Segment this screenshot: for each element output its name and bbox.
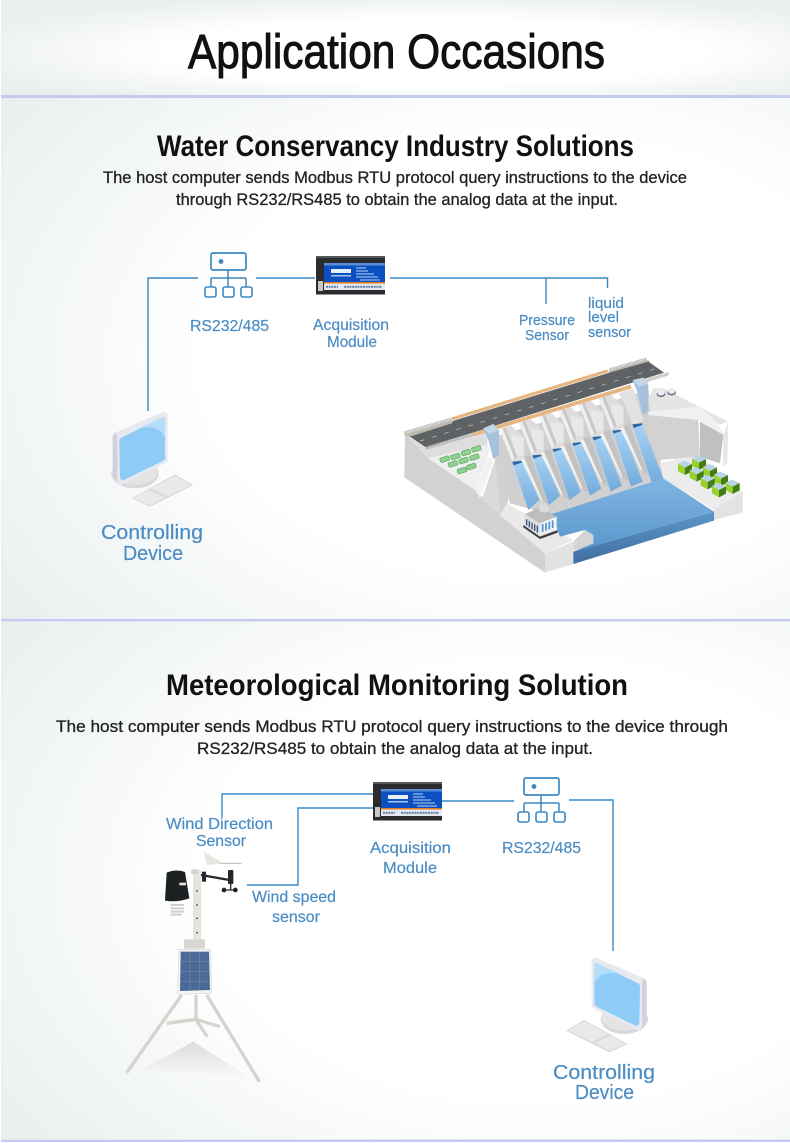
road — [405, 420, 452, 437]
label: RS232/485: RS232/485 — [502, 840, 581, 857]
right green blocks — [678, 456, 740, 497]
label: wind speed sensor — [252, 889, 336, 926]
text block: meteorological description — [56, 717, 728, 758]
label: controlling device — [101, 522, 203, 565]
title: Application Occasions — [188, 26, 605, 79]
label: liquid level sensor: level — [588, 310, 619, 326]
text block: water conservancy description: The host computer sends Modbus RTU protocol query instructions to the device — [103, 168, 687, 187]
text block: water conservancy description: through RS232/RS485 to obtain the analog data at the input. — [176, 190, 618, 209]
label: acquisition module: Acquisition — [370, 840, 451, 857]
panel: water conservancy background — [1, 98, 790, 619]
label: liquid level sensor: sensor — [588, 325, 631, 341]
heading: meteorological monitoring: Meteorological Monitoring Solution — [166, 669, 628, 702]
icon: acquisition module — [373, 782, 442, 820]
label: acquisition module: Module — [383, 860, 437, 877]
label: pressure sensor: Sensor — [525, 328, 569, 344]
icon: RS232/485 network — [205, 253, 252, 297]
pool — [552, 478, 714, 552]
tanks — [657, 391, 665, 397]
text block: meteorological description: The host computer sends Modbus RTU protocol query instructions to the device through — [56, 717, 728, 736]
label: acquisition module — [313, 317, 389, 351]
text block: meteorological description: RS232/RS485 to obtain the analog data at the input. — [197, 739, 593, 758]
label: liquid level sensor: liquid — [588, 296, 624, 312]
icon: controlling device computer — [566, 957, 648, 1052]
label: pressure sensor: Pressure — [519, 313, 575, 329]
connector lines: water conservancy — [148, 278, 608, 411]
label: wind direction sensor: Wind Direction — [166, 816, 273, 833]
left embankment — [404, 433, 545, 573]
icon: RS232/485 network — [518, 778, 565, 822]
panel: meteorological background — [1, 622, 790, 1139]
label: wind direction sensor — [166, 816, 273, 850]
label: wind speed sensor: Wind speed — [252, 889, 336, 906]
label: pressure sensor — [519, 313, 575, 344]
label: acquisition module: Module — [327, 334, 377, 351]
heading: water conservancy: Water Conservancy Industry Solutions — [157, 130, 634, 163]
illustration: weather station — [127, 852, 259, 1082]
label: wind speed sensor: sensor — [272, 909, 321, 926]
label: controlling device: Controlling — [101, 522, 203, 544]
panel: header background — [1, 0, 790, 95]
icon: controlling device computer — [111, 412, 193, 507]
piers — [499, 425, 549, 505]
label: controlling device: Device — [575, 1082, 634, 1104]
towers — [483, 424, 499, 459]
spillway wall — [495, 390, 663, 515]
chutes — [512, 422, 663, 510]
label: acquisition module — [370, 840, 451, 877]
label: controlling device: Device — [123, 543, 183, 565]
left greenery — [439, 445, 481, 474]
label: acquisition module: Acquisition — [313, 317, 389, 334]
text block: water conservancy description — [103, 168, 687, 209]
label: liquid level sensor — [588, 296, 631, 341]
connector lines: meteorological — [222, 794, 613, 951]
label: controlling device — [553, 1062, 655, 1104]
illustration: hydroelectric dam — [404, 359, 743, 573]
building — [523, 525, 558, 539]
label: RS232/485: RS232/485 — [190, 318, 269, 335]
label: controlling device: Controlling — [553, 1062, 655, 1084]
label: wind direction sensor: Sensor — [196, 833, 247, 850]
right embankment — [648, 388, 728, 425]
icon: acquisition module — [316, 256, 385, 294]
